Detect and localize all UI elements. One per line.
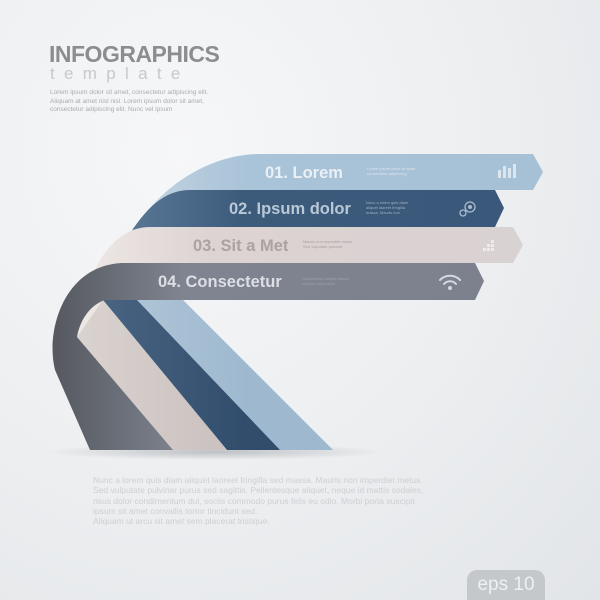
icon: wifi [440,276,460,284]
ribbon graphic: Consectetur aliquet neque [302,276,349,281]
bottom paragraph [93,475,423,526]
ribbon 1: light blue [120,154,543,450]
band labels: 01. Lorem [265,164,343,182]
bottom paragraph: Nunc a lorem quis diam aliquet laoreet fringilla sed massa. Mauris non imperdiet metus. [93,475,423,485]
ribbon graphic: aliquet laoreet fringilla [366,205,406,210]
eps badge: eps 10 [477,574,535,595]
ribbon graphic: 03. Sit a Met [193,237,289,255]
bottom paragraph: Sed vulputate pulvinar purus sed sagittis. Pellentesque aliquet, neque id mattis sodales, [93,485,423,495]
small band texts: consectetur adipiscing [367,171,407,176]
ribbon 2: navy [103,190,504,450]
ribbon graphic: Sed vulputate pulvinar [303,244,343,249]
ribbon 4: gray [53,263,484,450]
diagonal shading [137,300,333,450]
small band texts [367,166,416,176]
intro text: Lorem ipsum dolor sit amet, consectetur adipiscing elit. Aliquam at amet nisl nisl. Lorem ipsum dolor sit amet, consectetur adipiscing elit. Nunc vel ipsum [50,89,208,113]
subtitle: template [50,64,190,83]
bottom paragraph: ipsum sit amet convallis tortor tincidunt sed. [93,506,257,516]
icon: gears [460,202,475,216]
ribbon graphic: sodales nunc dolor [302,281,336,286]
bottom paragraph: Aliquam ut arcu sit amet sem placerat tristique. [93,516,270,526]
ribbon graphic: Mauris non imperdiet metus [303,239,352,244]
ribbon graphic: 04. Consectetur [158,273,282,291]
ribbon graphic: Nunc a lorem quis diam [366,200,409,205]
eps badge [467,570,545,600]
small band texts: Lorem ipsum dolor sit amet [367,166,416,171]
ribbon 3: beige [77,227,523,450]
title: INFOGRAPHICS [49,41,219,67]
icon: bar chart [498,164,516,178]
shadow [45,444,385,460]
ribbon graphic: massa. Mauris non [366,210,400,215]
icon: dots [483,240,494,251]
ribbon graphic: 02. Ipsum dolor [229,200,352,218]
bottom paragraph: risus dolor condimentum dui, sociis commodo purus felis eu odio. Morbi porta suscipit [93,496,415,506]
